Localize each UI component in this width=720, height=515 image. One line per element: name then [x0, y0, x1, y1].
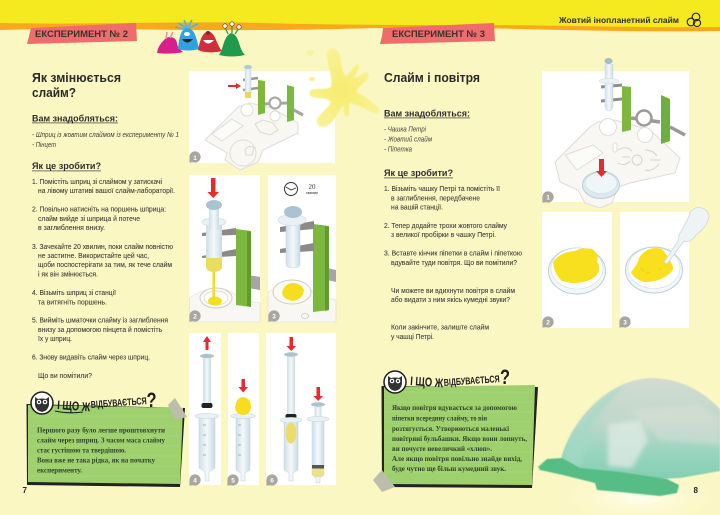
left hand-lettered heading: ? — [146, 389, 156, 412]
right green box: what is happening: повітряні бульбашки. Якщо вони лопнуть, — [392, 434, 527, 443]
page number 8: 8 — [694, 486, 698, 495]
left hand-lettered heading — [55, 389, 156, 414]
right page: instructions: Як це зробити? — [384, 168, 453, 178]
left page: panel 3, wait 20 minutes: хвилин — [306, 191, 318, 195]
right page: instructions: в заглиблення, передбачене — [391, 194, 480, 202]
right page: instructions: 1. Візьміть чашку Петрі та помістіть її — [384, 184, 501, 193]
right page heading: Слайм і повітря — [384, 70, 480, 85]
left green box: what is happening: слайм через шприц. З часом маса слайму — [37, 436, 165, 444]
left page: materials — [32, 114, 179, 149]
right green box: what is happening: Якщо повітря вдувається за допомогою — [392, 403, 517, 412]
left page: materials: Вам знадобляться: — [32, 114, 118, 124]
right page: instructions: 3. Вставте кінчик піпетки в слайм і піпеткою — [384, 248, 522, 258]
right hand-lettered heading — [410, 366, 510, 390]
photo: slime dome with air bubble — [538, 378, 720, 515]
left green box: what is happening: експерименту. — [37, 466, 82, 474]
right page: instructions: Коли закінчите, залиште слайм — [391, 322, 489, 332]
tab: experiment 2: ЕКСПЕРИМЕНТ № 2 — [35, 29, 128, 40]
left green box: what is happening — [26, 404, 185, 487]
left page: panel 3, wait 20 minutes: 3 — [272, 314, 276, 320]
tab: experiment 3 — [380, 23, 495, 44]
right page: photo panel 1, station with petri dish — [542, 58, 689, 208]
left page heading — [32, 70, 121, 100]
right owl badge — [384, 371, 406, 393]
right page: photo panel 1, station with petri dish: 1 — [546, 194, 550, 202]
right page: instructions: або видати з ним якісь кумедні звуки? — [391, 295, 510, 304]
right hand-lettered heading: ВІДБУВАЄТЬСЯ — [443, 374, 500, 389]
left page: instructions: їх у шприц. — [37, 334, 72, 343]
left page: instructions: на лівому штативі вашої слайм-лабораторії. — [38, 186, 175, 195]
right green box: what is happening: ви почуєте невеличкий «хлюп». — [392, 444, 492, 453]
left page: materials: - Пінцет — [32, 140, 56, 149]
tab: experiment 2 — [27, 23, 137, 44]
left page: materials: - Шприц із жовтим слаймом із експерименту № 1 — [32, 130, 179, 139]
left page: instructions: не застигне. Використайте цей час, — [38, 251, 149, 260]
left page: instructions: і як він змінюється. — [38, 270, 98, 278]
left page: instructions: щоби поспостерігати за тим, як тече слайм — [38, 260, 172, 269]
right green box: what is happening: піпетки всередину слайму, то він — [392, 414, 488, 422]
left page: instructions: Що ви помітили? — [38, 371, 92, 380]
left page: panel 4, pull plunger out: 4 — [193, 478, 197, 484]
right page: materials — [384, 108, 470, 154]
right page: panel 3, pipette in slime — [619, 208, 709, 328]
right page: instructions: вдувайте туди повітря. Що ви помітили? — [391, 258, 517, 267]
left page: instructions — [32, 161, 175, 380]
left page: instructions: 6. Знову видавіть слайм через шприц. — [32, 352, 150, 362]
right page: materials: Вам знадобляться: — [384, 108, 470, 118]
left page: photo panel 1, station with syringe — [189, 65, 335, 170]
left green box: what is happening: Першого разу було легше проштовхнути — [37, 426, 166, 434]
left page: instructions: 5. Вийміть шматочки слайму із заглиблення — [32, 316, 168, 324]
left page: panel 3, wait 20 minutes: 20 — [308, 183, 316, 191]
left hand-lettered heading: І ЩО Ж — [57, 398, 91, 414]
right page: instructions: у чашці Петрі. — [391, 332, 434, 341]
left page: panel 6, syringes with thicker slime — [266, 333, 336, 486]
left hand-lettered heading: ВІДБУВАЄТЬСЯ — [90, 396, 147, 411]
left page: instructions: 2. Повільно натисніть на поршень шприца: — [32, 204, 166, 214]
left page: panel 3, wait 20 minutes — [268, 175, 336, 322]
left page: instructions: в заглиблення внизу. — [38, 223, 105, 232]
left page: instructions: 1. Помістіть шприц зі слаймом у затискачі — [32, 177, 162, 186]
right page: materials: - Чашка Петрі — [384, 124, 426, 134]
right page: panel 2, slime in petri dish: 2 — [546, 320, 550, 326]
left page heading: слайм? — [32, 85, 76, 100]
tab: experiment 3: ЕКСПЕРИМЕНТ № 3 — [392, 29, 485, 40]
left page: instructions: та витягніть поршень. — [38, 298, 107, 306]
left page: panel 5, slime into syringe: 5 — [231, 478, 235, 484]
right tape — [373, 470, 395, 492]
right page: instructions — [384, 168, 522, 341]
right page: materials: - Жовтий слайм — [384, 134, 432, 144]
running title: yellow alien slime: Жовтий інопланетний слайм — [558, 15, 679, 25]
left page: panel 6, syringes with thicker slime: 6 — [270, 478, 274, 484]
left owl badge — [31, 392, 53, 414]
right green box: what is happening: буде чутно ще більш кумедний звук. — [392, 464, 506, 473]
right green box: what is happening: Але якщо повітря повільно знайде вихід, — [392, 454, 522, 463]
right hand-lettered heading: ? — [500, 366, 510, 389]
right page: materials: - Піпетка — [384, 144, 412, 154]
right page: instructions: 2. Тепер додайте трохи жовтого слайму — [384, 221, 507, 230]
left page: panel 2, pressing plunger — [189, 175, 260, 322]
left green box: what is happening: стає густішою та твердішою. — [37, 446, 126, 454]
left tape — [168, 398, 187, 420]
right page: instructions: Чи можете ви вдихнути повітря в слайм — [391, 286, 515, 295]
left page: panel 5, slime into syringe — [227, 333, 259, 486]
left page heading: Як змінюється — [32, 70, 121, 85]
monsters illustration — [157, 20, 245, 56]
left page: panel 4, pull plunger out — [189, 333, 221, 486]
left page: instructions: 4. Візьміть шприц зі станції — [32, 288, 117, 297]
right page: panel 3, pipette in slime: 3 — [623, 320, 627, 326]
left page: instructions: Як це зробити? — [32, 161, 101, 171]
left page: instructions: слайм вийде зі шприца й потече — [38, 214, 140, 223]
left green box: what is happening: Вона вже не така рідка, як на початку — [37, 456, 155, 464]
left page: instructions: 3. Зачекайте 20 хвилин, поки слайм повністю — [32, 242, 173, 251]
header band: yellow with orange wave — [0, 0, 720, 31]
running title: yellow alien slime — [558, 13, 701, 27]
right green box: what is happening — [382, 385, 538, 488]
page number 7: 7 — [22, 486, 28, 495]
left page: panel 2, pressing plunger: 2 — [193, 314, 197, 320]
right hand-lettered heading: І ЩО Ж — [410, 374, 444, 390]
right page: instructions: на вашій станції. — [391, 202, 443, 212]
right page: panel 2, slime in petri dish — [542, 212, 612, 328]
yellow splat — [306, 48, 379, 127]
left page: instructions: внизу за допомогою пінцета й помістіть — [38, 325, 162, 334]
left page: photo panel 1, station with syringe: 1 — [193, 155, 197, 162]
right green box: what is happening: розтягується. Утворюються маленькі — [392, 424, 509, 433]
right page: instructions: з великої пробірки в чашку Петрі. — [391, 230, 496, 239]
